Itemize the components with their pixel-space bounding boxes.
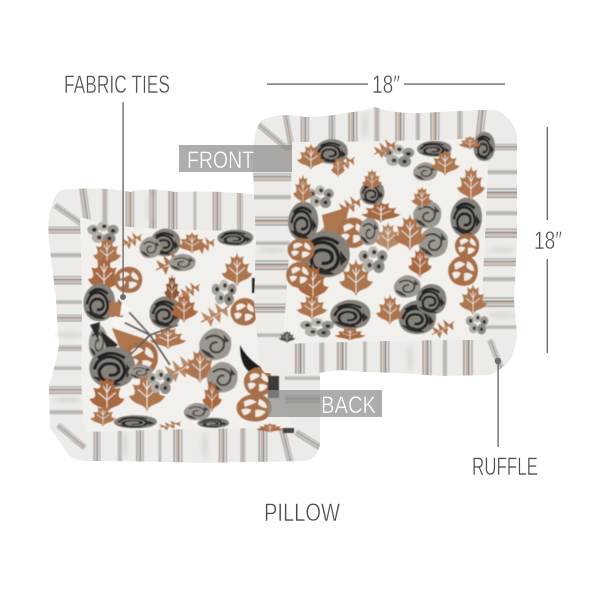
dimension: width 18 inches: 18″ [372,71,400,99]
callout: ruffle [472,358,538,481]
back pillow ruffle [48,188,320,463]
callout: back label: BACK [321,392,376,419]
back ruffle stripes [40,182,325,470]
back ruffle folds [54,194,208,459]
panel: front pillow [245,105,525,380]
callout: fabric ties [64,71,170,300]
front ruffle stripes [245,105,525,380]
front pillow body [283,138,489,344]
dimension: height 18 inches: 18″ [534,227,562,255]
callout: ruffle: RUFFLE [472,453,538,481]
icon: fabric ties [115,300,178,365]
front floral print [279,132,495,343]
callout: front label [179,145,292,174]
caption: pillow: PILLOW [264,499,340,527]
callout: back label [268,390,382,419]
callout: front label: FRONT [187,147,254,174]
panel: back pillow [40,182,325,470]
front pillow ruffle [253,107,517,376]
back floral print [83,221,294,433]
callout: fabric ties: FABRIC TIES [64,71,170,99]
back pillow body [80,217,294,432]
front ruffle folds [258,112,516,372]
